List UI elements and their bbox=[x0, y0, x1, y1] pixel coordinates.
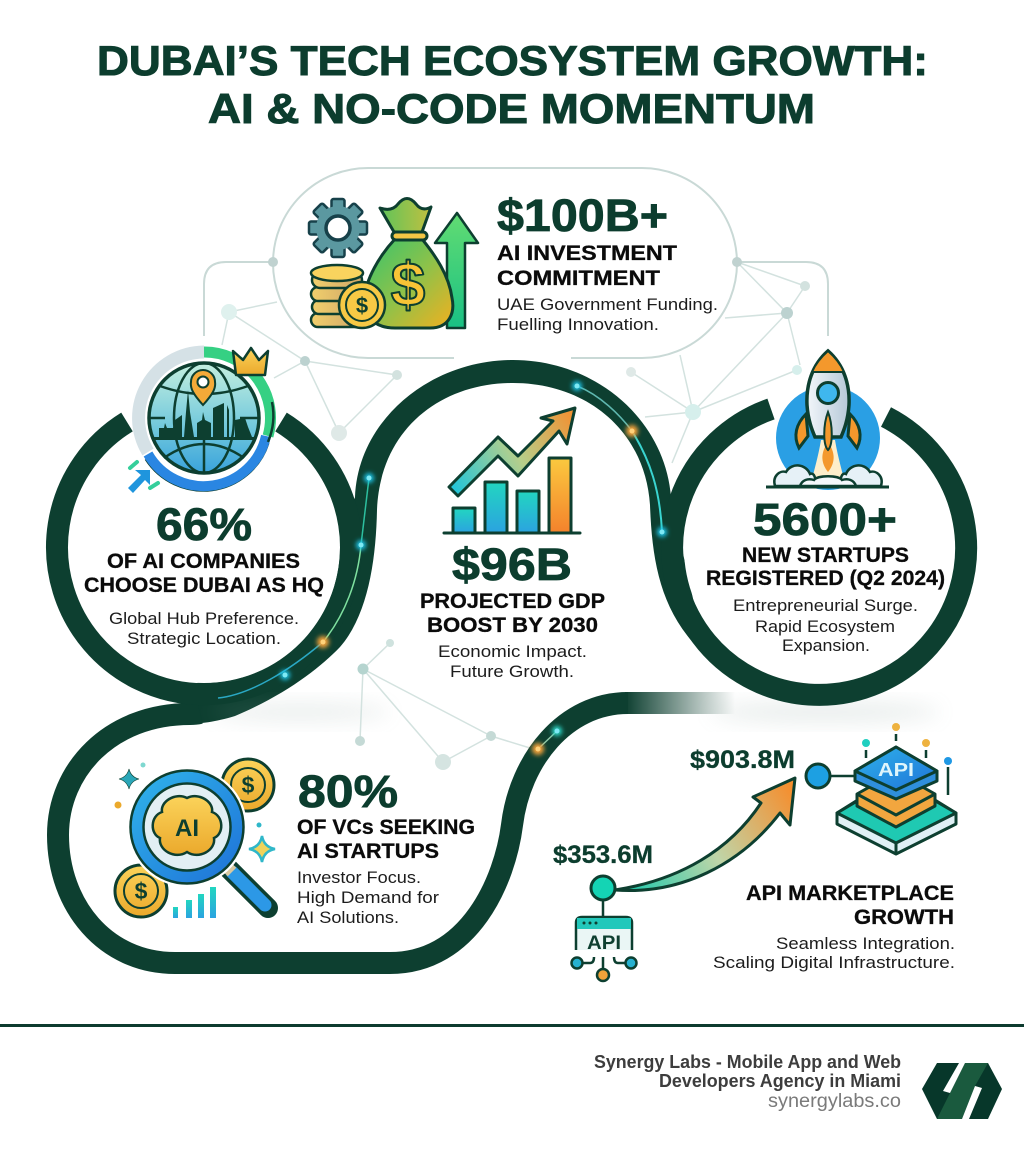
icon: dollar coin bottom: $ bbox=[135, 878, 148, 904]
icon: gear bbox=[309, 199, 367, 257]
footer: Synergy Labs credit: Synergy Labs - Mobile App and Web bbox=[594, 1052, 901, 1072]
icon: API server stack bbox=[806, 723, 956, 854]
panel: $100B+ AI investment commitment: UAE Government Funding. bbox=[497, 295, 718, 314]
footer: Synergy Labs credit: synergylabs.co bbox=[768, 1091, 901, 1112]
panel: $96B projected GDP boost: BOOST BY 2030 bbox=[427, 614, 598, 637]
icon: growth arrow bbox=[435, 213, 478, 328]
footer: Synergy Labs credit: Developers Agency in Miami bbox=[659, 1071, 901, 1091]
icon: dollar coin top bbox=[222, 759, 274, 811]
icon: globe with skyline bbox=[139, 352, 273, 490]
icon: API server stack: API bbox=[878, 760, 914, 780]
icon: bar chart with rising arrow bbox=[444, 408, 580, 533]
panel: 5600+ new startups registered: REGISTERED (Q2 2024) bbox=[706, 567, 945, 590]
footer rule bbox=[0, 1024, 1024, 1027]
icon: small API window: API bbox=[587, 933, 621, 954]
panel: API marketplace growth: GROWTH bbox=[854, 906, 954, 929]
stat text: $96B bbox=[452, 539, 572, 590]
panel: API marketplace growth: Seamless Integration. bbox=[776, 934, 955, 953]
logo: Synergy Labs hexagon bbox=[922, 1063, 1002, 1119]
pill outline bbox=[204, 168, 828, 358]
panel: API marketplace growth: Scaling Digital Infrastructure. bbox=[713, 953, 955, 972]
panel: $96B projected GDP boost: Future Growth. bbox=[450, 662, 574, 681]
panel: 80% of VCs seeking AI startups bbox=[58, 692, 735, 963]
panel: 80% of VCs seeking AI startups: High Demand for bbox=[297, 888, 439, 907]
stat text: 80% bbox=[298, 766, 398, 817]
panel: 80% of VCs seeking AI startups: OF VCs SEEKING bbox=[297, 816, 475, 839]
icon: magnifier with AI brain bbox=[115, 759, 274, 917]
icon: money bag: $ bbox=[391, 251, 425, 320]
panel: 66% of AI companies choose Dubai as HQ: OF AI COMPANIES bbox=[107, 550, 300, 573]
curved growth arrow bbox=[615, 778, 795, 891]
panel: 66% of AI companies choose Dubai as HQ bbox=[57, 348, 351, 694]
panel: 80% of VCs seeking AI startups: AI Solutions. bbox=[297, 908, 399, 927]
stat text: 5600+ bbox=[753, 494, 897, 545]
panel: 5600+ new startups registered: Rapid Ecosystem bbox=[755, 617, 895, 636]
panel: $96B projected GDP boost bbox=[420, 408, 605, 681]
dark arch: middle panel outline bbox=[185, 360, 730, 745]
ring bbox=[57, 411, 351, 694]
panel: 66% of AI companies choose Dubai as HQ: CHOOSE DUBAI AS HQ bbox=[84, 574, 324, 597]
icon: coin stack bbox=[311, 265, 385, 328]
title bbox=[97, 37, 928, 132]
panel: $96B projected GDP boost: PROJECTED GDP bbox=[420, 590, 605, 613]
network: connector lines and nodes bbox=[221, 262, 810, 770]
icon: rocket bbox=[766, 351, 889, 490]
icon: mini bars bbox=[173, 887, 216, 918]
panel: $100B+ AI investment commitment: AI INVESTMENT bbox=[497, 242, 677, 265]
title: AI & NO-CODE MOMENTUM bbox=[208, 85, 815, 132]
stat text: $100B+ bbox=[497, 190, 668, 241]
panel: 66% of AI companies choose Dubai as HQ: Global Hub Preference. bbox=[109, 609, 299, 628]
panel: 5600+ new startups registered: Expansion. bbox=[782, 636, 870, 655]
panel: $96B projected GDP boost: Economic Impact. bbox=[438, 642, 587, 661]
panel: 80% of VCs seeking AI startups: Investor Focus. bbox=[297, 868, 421, 887]
panel: 5600+ new startups registered: NEW STARTUPS bbox=[742, 544, 909, 567]
icon: small arrow bbox=[128, 462, 158, 493]
icon: magnifier with AI brain: AI bbox=[175, 815, 199, 842]
icon: small API window bbox=[572, 876, 636, 981]
title: DUBAI’S TECH ECOSYSTEM GROWTH: bbox=[97, 37, 928, 84]
icon: money bag bbox=[365, 198, 453, 328]
stat values: $903.8M bbox=[690, 746, 795, 774]
ring bbox=[672, 409, 966, 695]
panel: API marketplace growth bbox=[553, 723, 956, 981]
panel: 5600+ new startups registered: Entrepreneurial Surge. bbox=[733, 596, 918, 615]
panel: 66% of AI companies choose Dubai as HQ: Strategic Location. bbox=[127, 629, 281, 648]
icon: dollar coin top: $ bbox=[242, 772, 255, 798]
stat text: 66% bbox=[156, 499, 252, 550]
soft shadows under circles bbox=[210, 702, 940, 722]
icon: sparkles bbox=[114, 762, 275, 862]
stat text: API MARKETPLACE bbox=[746, 882, 954, 905]
panel: 80% of VCs seeking AI startups: AI STARTUPS bbox=[297, 840, 439, 863]
neon data lines and glowing dots bbox=[218, 381, 667, 755]
icon: dollar coin bottom bbox=[115, 865, 167, 917]
panel: $100B+ AI investment commitment: COMMITMENT bbox=[497, 267, 660, 290]
icon: crown bbox=[233, 348, 268, 375]
icon: coin stack: $ bbox=[356, 293, 368, 318]
blob outline bbox=[58, 703, 628, 963]
footer: Synergy Labs credit bbox=[594, 1052, 901, 1112]
panel: 5600+ new startups registered bbox=[672, 351, 966, 695]
panel: API marketplace growth: $353.6M bbox=[553, 841, 653, 869]
panel: $100B+ AI investment commitment: Fuelling Innovation. bbox=[497, 315, 659, 334]
panel: $100B+ AI investment commitment bbox=[204, 168, 828, 358]
